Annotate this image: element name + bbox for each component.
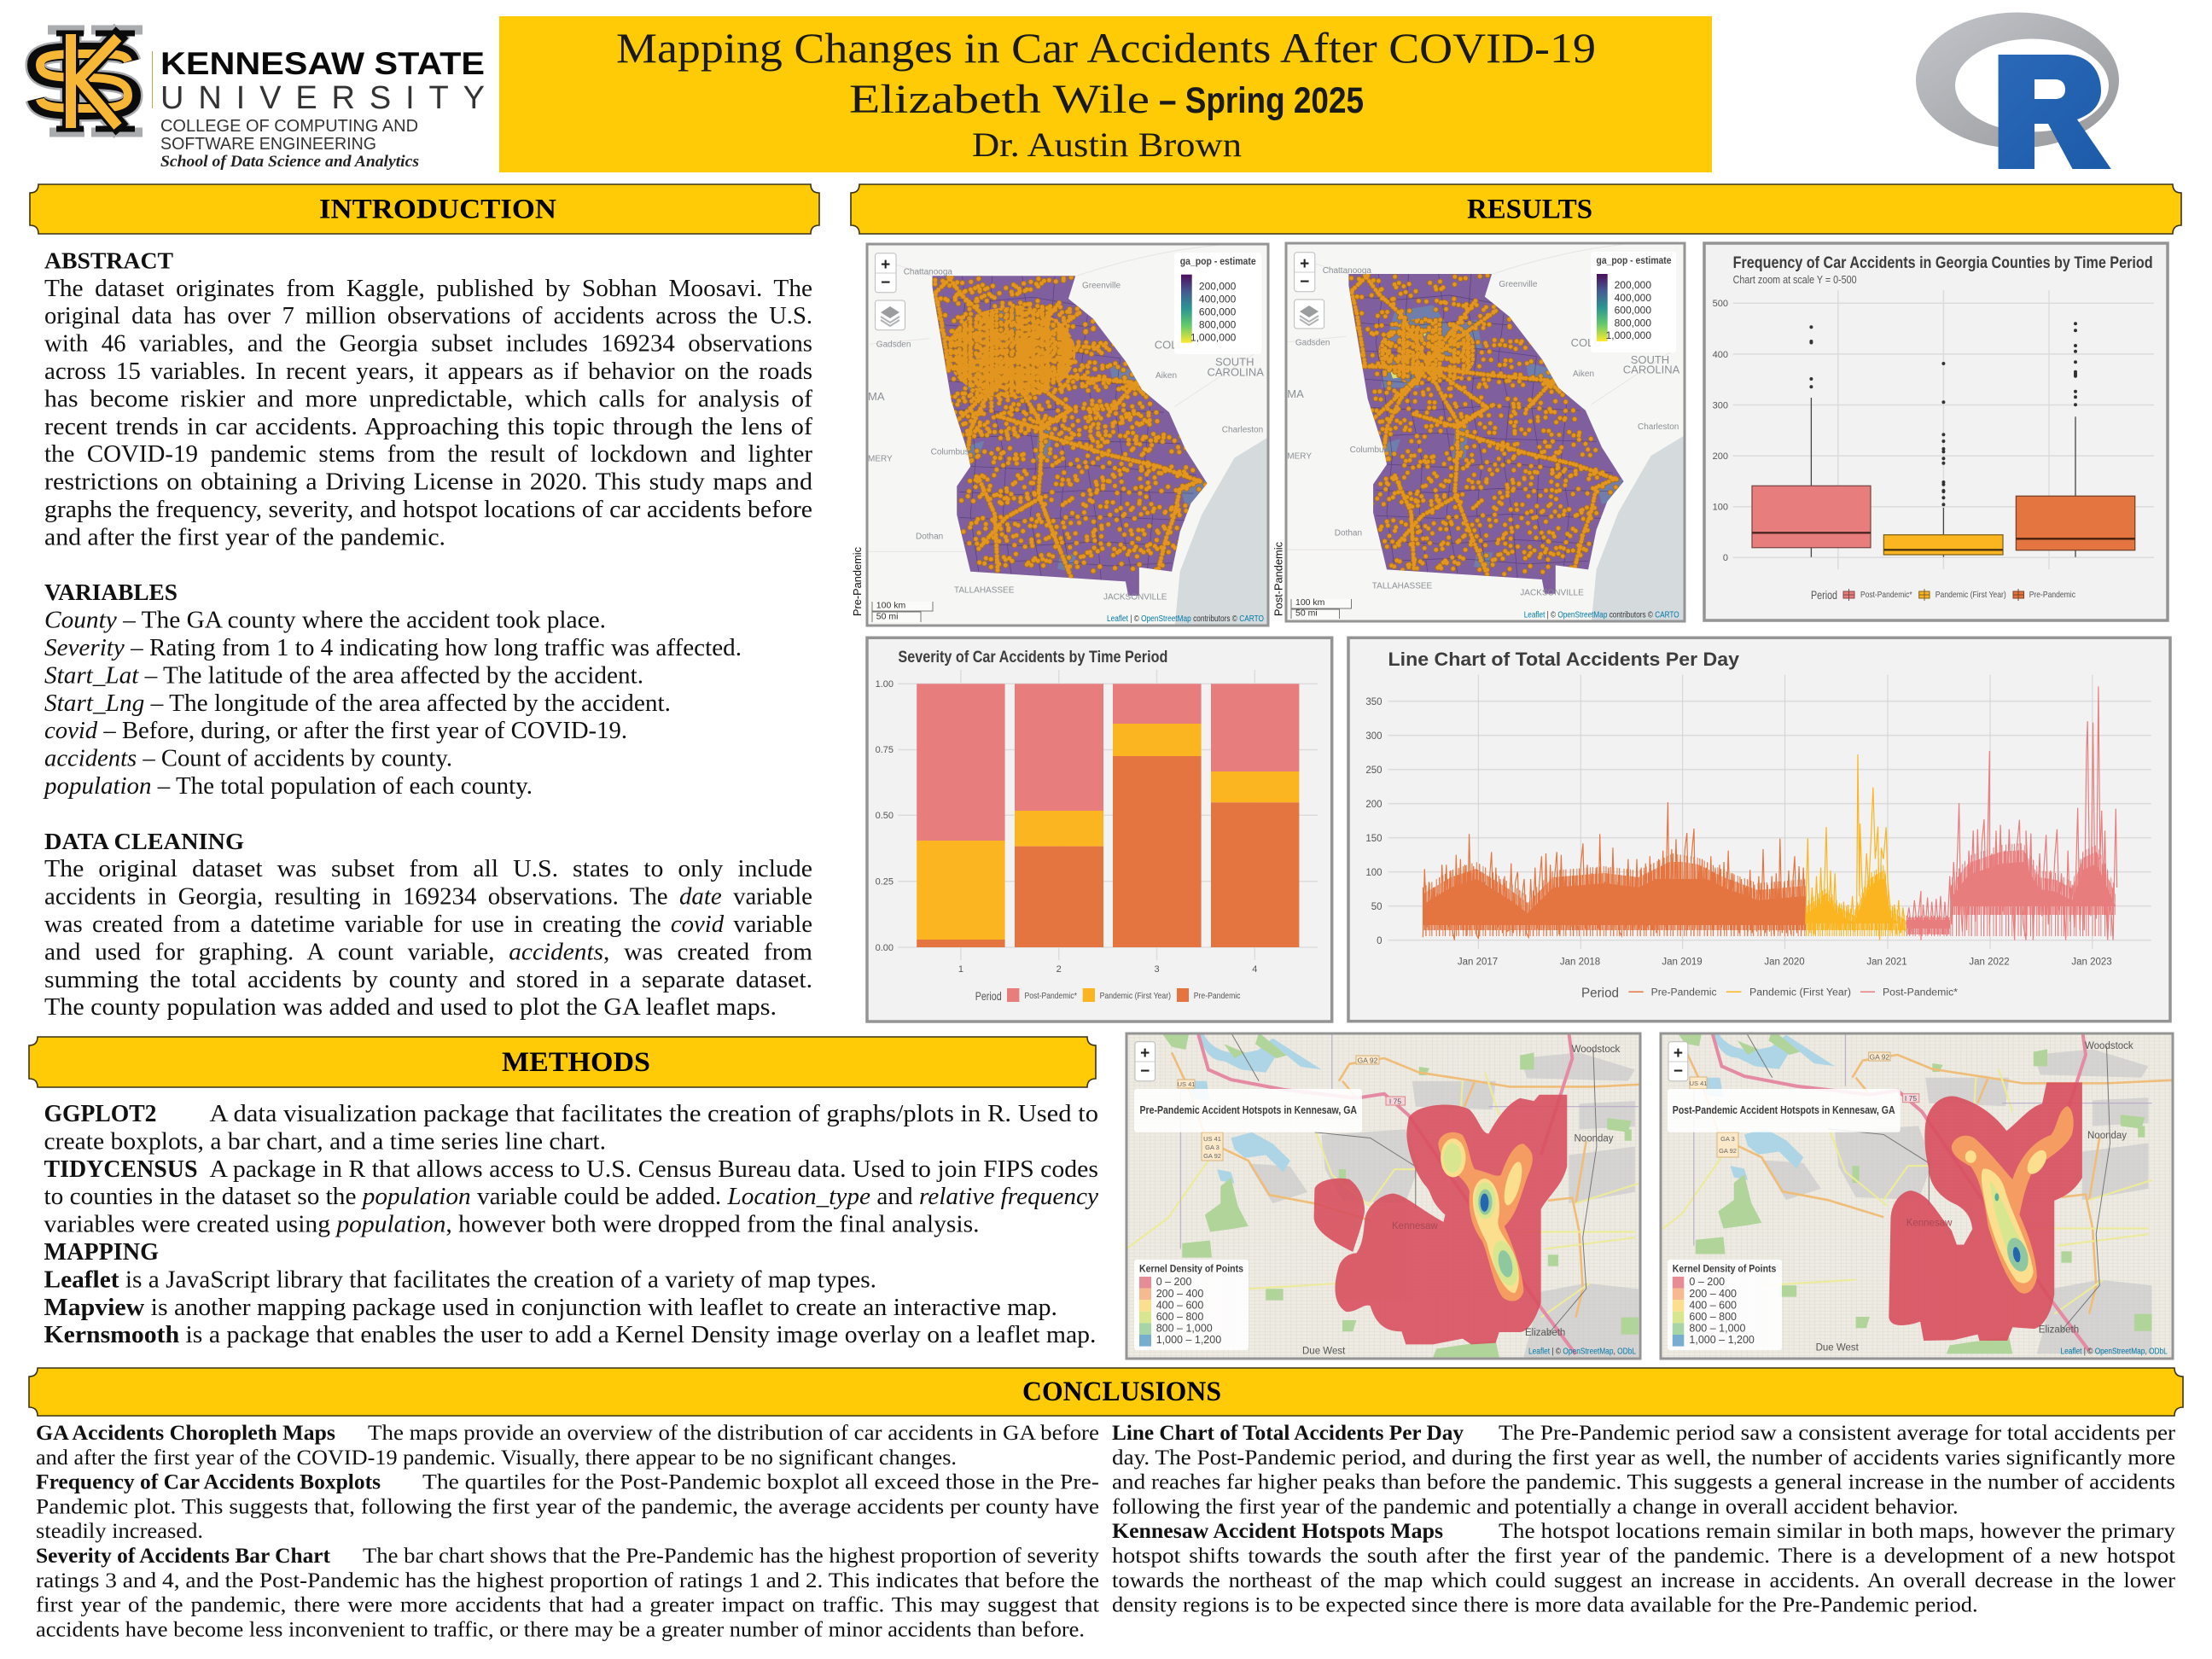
text: Kennesaw hotspots: Kennesaw Accident Hotspots Maps [1112, 1520, 1443, 1543]
map place labels: MA [868, 390, 885, 403]
gridlines and axis labels [876, 670, 1318, 975]
text: tidycensus: variables were created using population, however both were dropped from the final analysis. [44, 1212, 980, 1238]
map labels [1178, 1045, 1621, 1357]
map labels: I 75 [1389, 1097, 1401, 1106]
heading: RESULTS [851, 184, 2181, 234]
map labels: Kennesaw [1906, 1219, 1953, 1229]
panel: boxplot chart [1704, 243, 2168, 620]
text: variables: County – The GA county where the accident took place. [44, 608, 606, 634]
map: pre-pandemic kernel density overlay [1128, 1034, 1639, 1357]
heading: INTRODUCTION: INTRODUCTION [319, 195, 556, 225]
text: abstract: ABSTRACT [44, 247, 173, 273]
legend: Pre-Pandemic [1651, 988, 1717, 998]
text: data cleaning [44, 829, 812, 1021]
text: tidycensus: TIDYCENSUS [44, 1156, 198, 1183]
legend: population: 200,000 [1615, 279, 1651, 291]
map: post-pandemic kernel density overlay [1662, 1034, 2171, 1357]
gridlines and axis labels: 50 [1371, 902, 1382, 912]
zoom control: − [1674, 1062, 1683, 1080]
gridlines and axis labels: 0 [1377, 936, 1382, 946]
text: abstract: has become riskier and more unpredictable, which calls for analysis of [44, 386, 813, 412]
map place labels: Gadsden [1295, 338, 1330, 347]
legend: kernel density [1668, 1260, 1782, 1350]
legend: population: ga_pop - estimate [1180, 255, 1256, 267]
gridlines and axis labels: 300 [1365, 731, 1382, 742]
heading: CONCLUSIONS: CONCLUSIONS [1022, 1377, 1221, 1407]
gridlines and axis labels: Jan 2019 [1662, 958, 1703, 968]
text: tidycensus: A package in R that allows access to U.S. Census Bureau data. Used to join FIPS codes [210, 1156, 1098, 1183]
map labels: US 41 [1203, 1135, 1221, 1143]
text: data cleaning: The original dataset was subset from all U.S. states to only include [44, 856, 812, 882]
text: line chart [1112, 1422, 2176, 1518]
scale bar: 50 mi [1295, 608, 1318, 618]
gridlines and y axis: 500 [1713, 299, 1728, 309]
text: data cleaning: was created from a datetime variable for use in creating the covid variable [44, 911, 812, 938]
icon: R logo [1916, 12, 2119, 169]
text block: conclusions right column [1112, 1422, 2176, 1617]
text: tidycensus: to counties in the dataset so the population variable could be added. Location_type and relative frequency [44, 1184, 1099, 1210]
legend: population: 1,000,000 [1606, 329, 1651, 341]
logo: Kennesaw State University: UNIVERSITY [160, 80, 485, 116]
legend: kernel density: 0 – 200 [1156, 1276, 1191, 1288]
legend: Pandemic (First Year) [1749, 988, 1851, 998]
text: mapping: Leaflet is a JavaScript library that facilitates the creation of a variety of map types. [44, 1266, 876, 1293]
scale bar [1291, 597, 1352, 619]
text: variables: accidents – Count of accidents by county. [44, 746, 452, 772]
legend: population: 200,000 [1199, 280, 1237, 292]
legend: population: 600,000 [1199, 306, 1237, 317]
label: Pre-Pandemic: Pre-Pandemic [851, 547, 864, 616]
text block: conclusions left column [36, 1422, 1100, 1641]
icon: KS monogram [36, 29, 143, 133]
legend: population: 800,000 [1615, 317, 1651, 329]
map labels: Woodstock [2085, 1041, 2133, 1051]
heading: METHODS [29, 1037, 1096, 1087]
map place labels: Chattanooga [1323, 266, 1371, 276]
legend: Post-Pandemic* [1024, 991, 1077, 1001]
map labels: GA 3 [1720, 1135, 1735, 1143]
gridlines and axis labels: 250 [1365, 765, 1382, 776]
map place labels: JACKSONVILLE [1520, 589, 1584, 598]
text: Kennesaw hotspots: hotspot shifts towards the south after the first year of the pandemic. There is a development of a new hotspot [1112, 1545, 2175, 1568]
gridlines and axis labels: 2 [1057, 964, 1062, 975]
map place labels: Aiken [1155, 371, 1177, 381]
icon: layers control [1295, 300, 1324, 329]
line series: pandemic first year [1806, 754, 1906, 940]
line series: post-pandemic [1906, 686, 2117, 940]
text: abstract: and after the first year of the pandemic. [44, 524, 445, 550]
text block: abstract, variables and data cleaning [43, 247, 813, 1021]
map labels: US 41 [1178, 1080, 1195, 1088]
text: mapping [44, 1239, 1097, 1348]
gridlines and axis labels: 0.00 [876, 943, 894, 953]
legend: Pandemic (First Year) [1100, 991, 1171, 1001]
text: abstract: restrictions on obtaining a Driving License in 2020. This study maps and [44, 469, 812, 496]
map labels: Elizabeth [1525, 1328, 1565, 1338]
panel: post-pandemic Georgia map [1285, 242, 1686, 623]
scale bar: 100 km [876, 601, 905, 611]
map labels: Elizabeth [2039, 1325, 2079, 1336]
bar: severity 3 [1113, 684, 1202, 947]
map: pre-pandemic accident points on Georgia choropleth [869, 246, 1266, 625]
panel: pre-pandemic Kennesaw hotspot map [1085, 1022, 1684, 1391]
gridlines and axis labels: 1 [958, 964, 963, 975]
legend: population [1174, 253, 1261, 354]
text: mapping: MAPPING [44, 1239, 159, 1266]
gridlines and axis labels [1365, 675, 2151, 968]
gridlines and axis labels: Jan 2021 [1866, 958, 1907, 968]
legend: kernel density: 800 – 1,000 [1156, 1323, 1213, 1335]
map labels: Due West [1816, 1343, 1860, 1353]
panel: post-pandemic Kennesaw hotspot map [1598, 1018, 2197, 1388]
chart title: Severity of Car Accidents by Time Period [898, 648, 1167, 667]
text: frequency boxplots: steadily increased. [36, 1520, 203, 1543]
legend: population: 800,000 [1199, 318, 1237, 330]
text: frequency boxplots: Pandemic plot. This suggests that, following the first year of the pandemic, the average accidents per county have [36, 1495, 1099, 1518]
map place labels: Aiken [1573, 370, 1594, 379]
map place labels: COLU [1571, 336, 1602, 349]
text: frequency boxplots [36, 1471, 1099, 1543]
map place labels: Columbus [1350, 445, 1388, 455]
map: post-pandemic accident points on Georgia choropleth [1287, 244, 1683, 620]
map place labels: Chattanooga [904, 268, 952, 277]
text: GA accidents choropleth maps [36, 1422, 1099, 1470]
chart title: Line Chart of Total Accidents Per Day [1388, 649, 1740, 670]
panel: line chart of accidents per day [1348, 637, 2170, 1022]
legend: population: 400,000 [1199, 293, 1237, 305]
title: Mapping Changes in Car Accidents After COVID-19 [616, 24, 1596, 72]
legend [1581, 987, 1959, 1001]
map place labels: TALLAHASSEE [954, 585, 1015, 595]
attribution: Leaflet | © OpenStreetMap contributors © CARTO [1107, 614, 1264, 624]
legend: kernel density: 400 – 600 [1689, 1299, 1737, 1311]
zoom control [1668, 1042, 1688, 1081]
line series: pre-pandemic [1423, 802, 1806, 940]
zoom control: + [1300, 255, 1309, 273]
zoom control [1135, 1042, 1155, 1081]
gridlines and axis labels: 0.25 [876, 877, 894, 888]
author: Elizabeth Wile [849, 77, 1150, 122]
title banner [499, 16, 1712, 172]
text: variables [43, 579, 742, 800]
text: abstract: recent trends in car accidents. Approaching this topic through the lens of [44, 414, 813, 440]
text: abstract: The dataset originates from Kaggle, published by Sobhan Moosavi. The [44, 276, 812, 302]
legend: Post-Pandemic* [1883, 988, 1959, 998]
text: data cleaning: accidents in Georgia, resulting in 169234 observations. The date variable [44, 884, 812, 911]
gridlines and axis labels: Jan 2017 [1458, 958, 1498, 968]
zoom control: − [881, 274, 890, 292]
chart subtitle: Chart zoom at scale Y = 0-500 [1733, 273, 1857, 286]
legend: kernel density: 200 – 400 [1156, 1288, 1203, 1300]
text: ggplot2: create boxplots, a bar chart, and a time series line chart. [44, 1128, 606, 1155]
map place labels: MERY [1287, 452, 1312, 462]
text: data cleaning: The county population was added and used to plot the GA leaflet maps. [44, 994, 777, 1021]
box: pre-pandemic [2016, 322, 2135, 557]
legend: Pre-Pandemic [1194, 991, 1241, 1001]
text: abstract: graphs the frequency, severity, and hotspot locations of car accidents before [44, 497, 812, 523]
text: ggplot2: A data visualization package that facilitates the creation of graphs/plots in R. Used to [210, 1101, 1098, 1127]
legend: Period [1811, 588, 1837, 602]
text: severity bar chart [36, 1545, 1100, 1641]
text: variables: population – The total population of each county. [43, 773, 533, 800]
text: frequency boxplots: The quartiles for the Post-Pandemic boxplot all exceed those in the Pre- [422, 1471, 1099, 1494]
gridlines and axis labels: 3 [1154, 964, 1160, 975]
gridlines and axis labels: Jan 2022 [1969, 958, 2010, 968]
zoom control: − [1300, 273, 1309, 291]
gridlines and axis labels: 0.75 [876, 745, 894, 755]
text: mapping: Mapview is another mapping package used in conjunction with leaflet to create an interactive map. [44, 1295, 1057, 1321]
zoom control [1295, 253, 1315, 292]
gridlines and axis labels: 1.00 [876, 679, 894, 690]
map place labels: MERY [868, 455, 893, 464]
gridlines and axis labels: 4 [1252, 964, 1257, 975]
legend: population: 400,000 [1615, 292, 1651, 304]
text: severity bar chart: Severity of Accidents Bar Chart [36, 1545, 331, 1568]
gridlines and axis labels: 200 [1365, 800, 1382, 810]
map title box: Pre-Pandemic Accident Hotspots in Kennesaw, GA [1140, 1103, 1357, 1116]
label: Post-Pandemic: Post-Pandemic [1272, 542, 1285, 616]
advisor: Dr. Austin Brown [972, 125, 1242, 164]
gridlines and y axis: 200 [1713, 451, 1728, 462]
zoom control [876, 253, 896, 293]
map labels: Kennesaw [1392, 1221, 1438, 1231]
legend [1811, 588, 2075, 602]
legend: kernel density: 600 – 800 [1156, 1311, 1203, 1323]
map place labels: Greenville [1499, 280, 1538, 289]
logo: Kennesaw State University: SOFTWARE ENGINEERING [160, 135, 376, 154]
text: abstract: across 15 variables. In recent years, it appears as if behavior on the roads [44, 358, 812, 385]
text: severity bar chart: accidents have become less inconvenient to traffic, or there may be a greater number of minor accidents than before. [36, 1618, 1085, 1641]
text: severity bar chart: The bar chart shows that the Pre-Pandemic has the highest proportion of severity [363, 1545, 1100, 1568]
map place labels: Columbus [931, 448, 969, 457]
map place labels: CAROLINA [1207, 366, 1264, 379]
map labels: I 75 [1905, 1094, 1917, 1103]
legend: population: 600,000 [1615, 305, 1651, 317]
gridlines and axis labels: 350 [1365, 697, 1382, 707]
text: abstract: with 46 variables, and the Georgia subset includes 169234 observations [44, 331, 812, 358]
map title box [1668, 1089, 1901, 1132]
text: line chart: day. The Post-Pandemic period, and during the first year as well, the number of accidents varies significantly more [1112, 1447, 2175, 1470]
map place labels: Charleston [1638, 422, 1679, 432]
map place labels: Greenville [1082, 282, 1121, 291]
legend: kernel density: 800 – 1,000 [1689, 1323, 1745, 1335]
legend: population: 1,000,000 [1190, 331, 1237, 343]
zoom control: + [881, 256, 890, 274]
map labels: GA 92 [1869, 1053, 1889, 1062]
legend: Post-Pandemic* [1860, 590, 1912, 600]
text: variables: VARIABLES [44, 579, 178, 605]
gridlines and y axis: 100 [1713, 502, 1728, 512]
heading: INTRODUCTION [30, 184, 819, 234]
legend: kernel density: Kernel Density of Points [1673, 1263, 1777, 1275]
author [849, 77, 1364, 122]
panel: pre-pandemic Georgia map [865, 242, 1270, 626]
gridlines and y axis: 400 [1713, 350, 1728, 360]
map place labels [1287, 266, 1680, 598]
scale bar [872, 601, 933, 622]
attribution: Leaflet | © OpenStreetMap, ODbL [1528, 1348, 1636, 1357]
map title box [1134, 1089, 1362, 1132]
text block: methods [44, 1101, 1099, 1348]
heading: RESULTS: RESULTS [1467, 195, 1592, 225]
map title box: Post-Pandemic Accident Hotspots in Kennesaw, GA [1673, 1103, 1895, 1116]
text: ggplot2 [44, 1101, 1098, 1155]
text: abstract [44, 247, 813, 550]
map labels: Noonday [1574, 1134, 1614, 1144]
text: frequency boxplots: Frequency of Car Accidents Boxplots [36, 1471, 381, 1494]
gridlines and axis labels: 100 [1365, 868, 1382, 878]
text: abstract: the COVID-19 pandemic stems from the result of lockdown and lighter [44, 441, 813, 468]
text: line chart: The Pre-Pandemic period saw a consistent average for total accidents per [1499, 1422, 2176, 1445]
gridlines and axis labels: Jan 2020 [1764, 958, 1805, 968]
text: mapping: Kernsmooth is a package that enables the user to add a Kernel Density image overlay on a leaflet map. [44, 1322, 1097, 1348]
scale bar: 100 km [1295, 597, 1325, 608]
legend: kernel density: Kernel Density of Points [1139, 1263, 1243, 1275]
legend: population: ga_pop - estimate [1596, 254, 1672, 266]
logo: Kennesaw State University: COLLEGE OF COMPUTING AND [160, 117, 418, 136]
map place labels: Dothan [1335, 529, 1362, 538]
map labels: Due West [1302, 1347, 1346, 1357]
text: variables: Start_Lng – The longitude of the area affected by the accident. [44, 690, 671, 717]
zoom control: + [1140, 1045, 1150, 1062]
legend: Period [975, 989, 1002, 1003]
text: Kennesaw hotspots: towards the northeast of the map which could suggest an increase in accidents. An overall decrease in the lower [1112, 1569, 2176, 1592]
map place labels: JACKSONVILLE [1103, 593, 1167, 602]
panel: severity stacked bar chart [867, 637, 1332, 1022]
legend: kernel density: 400 – 600 [1156, 1299, 1203, 1311]
legend: kernel density [1134, 1260, 1249, 1350]
zoom control: + [1674, 1045, 1683, 1062]
text: variables: covid – Before, during, or after the first year of COVID-19. [44, 718, 627, 744]
map place labels [868, 268, 1264, 602]
map labels: GA 92 [1719, 1147, 1737, 1155]
gridlines and y axis: 300 [1713, 401, 1728, 411]
text: tidycensus [44, 1156, 1099, 1238]
attribution: Leaflet | © OpenStreetMap contributors © CARTO [1524, 610, 1679, 620]
text: ggplot2: GGPLOT2 [44, 1101, 157, 1127]
bar: severity 1 [917, 684, 1005, 947]
legend: Pandemic (First Year) [1936, 590, 2006, 600]
heading: METHODS: METHODS [502, 1047, 650, 1078]
text: line chart: and reaches far higher peaks than before the pandemic. This suggests a general increase in the number of accidents [1112, 1471, 2175, 1494]
text: severity bar chart: ratings 3 and 4, and the Post-Pandemic has the highest proportion of ratings 1 and 2. This indicates that before the [36, 1569, 1099, 1592]
bar: severity 2 [1015, 684, 1103, 947]
legend: Pre-Pandemic [2029, 590, 2075, 600]
legend: kernel density: 1,000 – 1,200 [1689, 1334, 1755, 1346]
map labels: US 41 [1690, 1080, 1707, 1087]
text: line chart: following the first year of the pandemic and potentially a change in overall accident behavior. [1112, 1495, 1959, 1518]
text: variables: Start_Lat – The latitude of the area affected by the accident. [44, 662, 643, 689]
scale bar: 50 mi [876, 612, 898, 622]
text: abstract: original data has over 7 million observations of accidents across the U.S. [44, 303, 812, 329]
gridlines and axis labels: Jan 2018 [1560, 958, 1600, 968]
map labels [1690, 1041, 2133, 1353]
map place labels: CAROLINA [1623, 363, 1680, 375]
text: GA accidents choropleth maps: The maps provide an overview of the distribution of car accidents in GA before [368, 1422, 1099, 1445]
gridlines and y axis [1713, 290, 2154, 569]
legend: kernel density: 1,000 – 1,200 [1156, 1334, 1221, 1346]
text: data cleaning: DATA CLEANING [44, 829, 244, 854]
text: Kennesaw hotspots: density regions is to be expected since there is more data available for the Pre-Pandemic period. [1112, 1594, 1978, 1617]
heading: CONCLUSIONS [29, 1368, 2183, 1416]
logo: Kennesaw State University [36, 29, 485, 171]
map labels: GA 92 [1358, 1057, 1378, 1065]
map place labels: Charleston [1222, 426, 1263, 435]
text: variables: Severity – Rating from 1 to 4 indicating how long traffic was affected. [44, 635, 742, 661]
map labels: Woodstock [1572, 1045, 1621, 1055]
map labels: GA 3 [1205, 1144, 1220, 1151]
gridlines and axis labels: 150 [1365, 834, 1382, 844]
text: Kennesaw hotspots: The hotspot locations remain similar in both maps, however the primary [1499, 1520, 2176, 1543]
logo wordmark: KENNESAW STATE [160, 46, 485, 81]
text: severity bar chart: first year of the pandemic, there were more accidents that had a greater impact on traffic. This may suggest that [36, 1594, 1099, 1617]
gridlines and axis labels: 0.50 [876, 811, 894, 821]
map place labels: COLU [1155, 338, 1185, 351]
logo: Kennesaw State University: School of Data Science and Analytics [160, 153, 419, 171]
bar: severity 4 [1211, 684, 1299, 947]
text: GA accidents choropleth maps: GA Accidents Choropleth Maps [36, 1422, 335, 1445]
author: – Spring 2025 [1159, 80, 1364, 121]
attribution: Leaflet | © OpenStreetMap, ODbL [2060, 1348, 2168, 1357]
gridlines and axis labels: Jan 2023 [2071, 958, 2112, 968]
map place labels: SOUTH [1215, 356, 1254, 369]
legend: Period [1581, 987, 1619, 1001]
map labels: GA 92 [1203, 1152, 1221, 1160]
map place labels: Gadsden [876, 341, 911, 350]
map place labels: Dothan [916, 533, 943, 542]
map place labels: TALLAHASSEE [1372, 581, 1433, 591]
text: line chart: Line Chart of Total Accidents Per Day [1112, 1422, 1464, 1445]
gridlines and y axis: 0 [1723, 553, 1728, 563]
legend [975, 988, 1241, 1003]
box: pandemic first year [1883, 362, 2003, 557]
box: post-pandemic [1752, 325, 1871, 557]
zoom control: − [1140, 1062, 1150, 1080]
map place labels: MA [1287, 387, 1304, 400]
map place labels: SOUTH [1631, 353, 1669, 366]
legend: kernel density: 200 – 400 [1689, 1288, 1737, 1300]
text: Kennesaw hotspots [1112, 1520, 2176, 1617]
text: GA accidents choropleth maps: and after the first year of the COVID-19 pandemic. Visually, there appear to be no significant changes. [36, 1447, 957, 1470]
text: data cleaning: and used for graphing. A count variable, accidents, was created from [44, 939, 812, 965]
map labels: Noonday [2087, 1131, 2127, 1141]
legend: kernel density: 600 – 800 [1689, 1311, 1737, 1323]
legend: population [1591, 252, 1676, 352]
text: data cleaning: summing the total accidents by county and stored in a separate dataset. [44, 967, 812, 993]
legend: kernel density: 0 – 200 [1689, 1276, 1725, 1288]
icon: layers control [876, 300, 905, 330]
